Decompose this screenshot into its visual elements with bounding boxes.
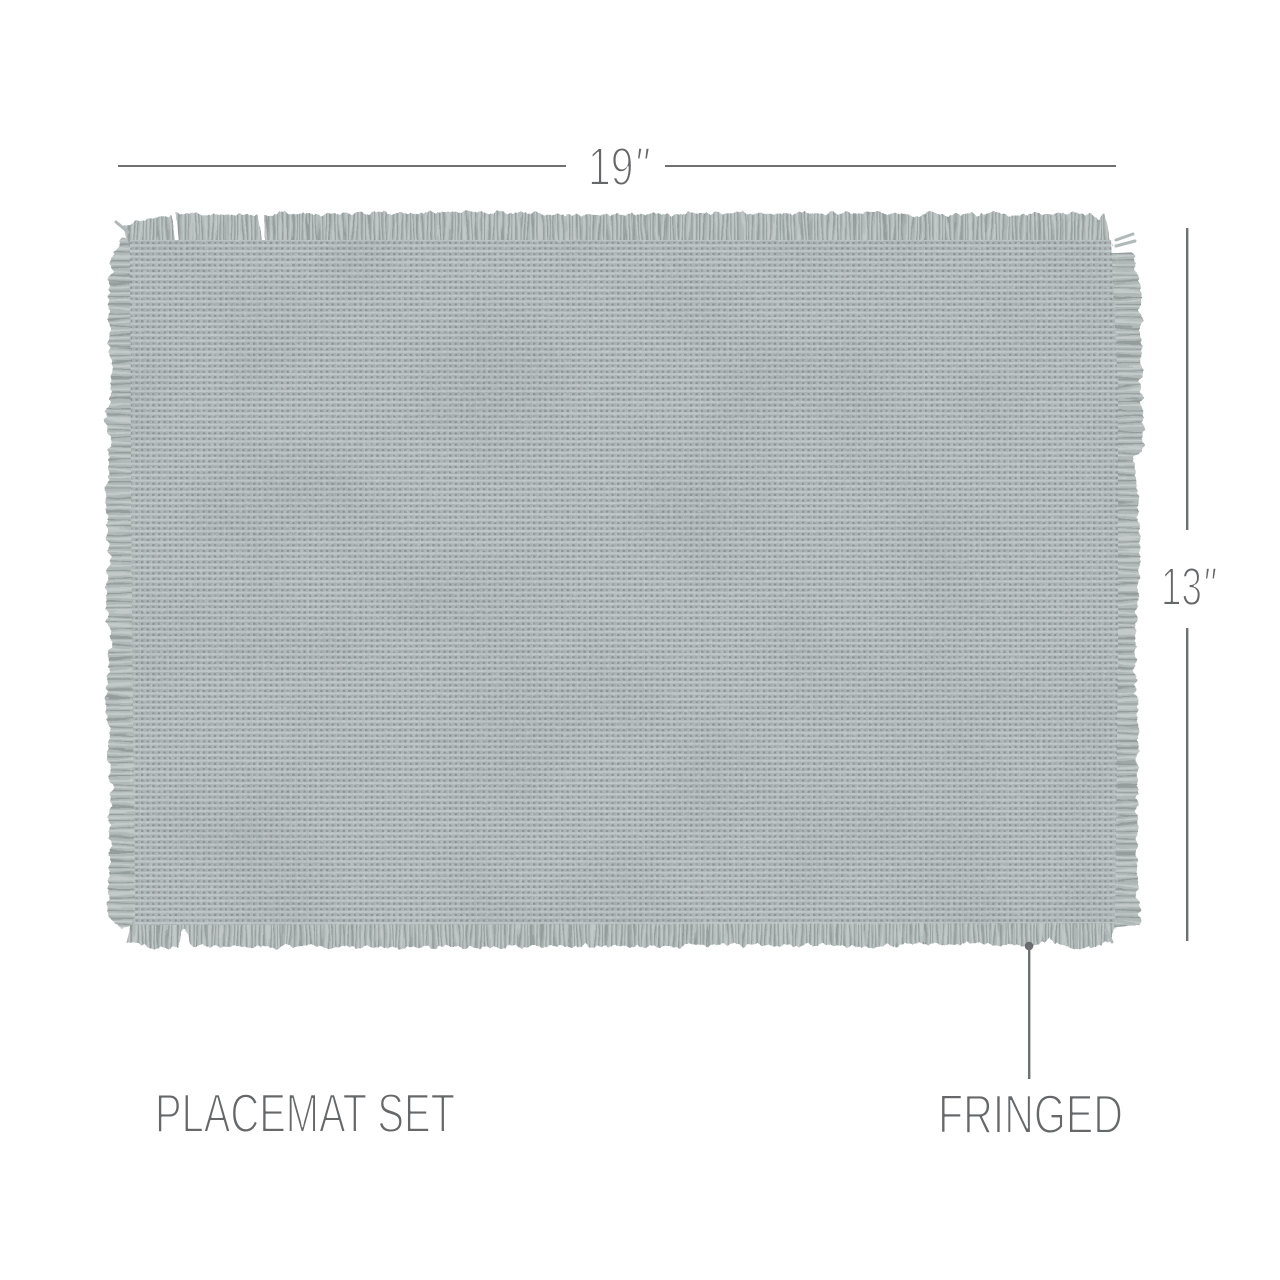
width line left (118, 165, 566, 167)
height line top (1186, 228, 1188, 530)
cloth shading (130, 240, 1118, 925)
bottom fringe (128, 916, 1116, 948)
top fringe (124, 212, 1112, 246)
woven body (130, 240, 1118, 925)
thread texture (130, 240, 1118, 925)
left fringe (105, 238, 140, 930)
callout line (1028, 946, 1030, 1079)
right fringe (1106, 250, 1143, 928)
width line right (665, 165, 1116, 167)
height line bottom (1186, 628, 1188, 941)
height label: 13" (1161, 557, 1217, 617)
fringed label: FRINGED (938, 1083, 1123, 1145)
callout dot (1025, 942, 1033, 950)
callout: fringed (938, 942, 1123, 1145)
placemat (105, 212, 1143, 948)
product label: PLACEMAT SET (155, 1082, 455, 1144)
stray threads at corners (116, 222, 1135, 942)
width label: 19" (588, 137, 650, 197)
